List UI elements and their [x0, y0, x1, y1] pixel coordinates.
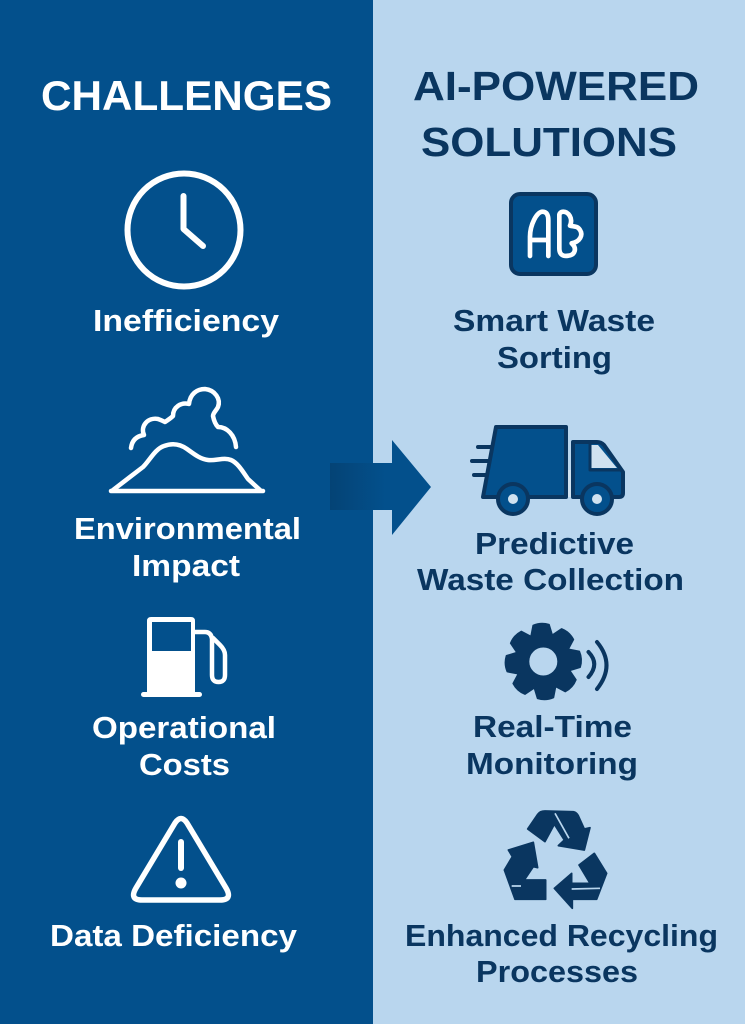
icon: recycling symbol [504, 811, 607, 908]
icon: fuel pump [144, 617, 225, 694]
icon: truck [472, 427, 623, 514]
label: real-time monitoring: Real-Time [473, 709, 632, 744]
icon: clock [128, 174, 240, 286]
panel: solutions [373, 0, 745, 1024]
label: predictive waste collection: Waste Collection [417, 562, 684, 597]
label: predictive waste collection [417, 526, 684, 597]
panel: challenges [0, 0, 373, 1024]
label: real-time monitoring [466, 709, 638, 781]
label: data deficiency: Data Deficiency [50, 918, 298, 953]
icon: gear with signal waves [505, 623, 606, 700]
heading: AI-powered solutions: AI-POWERED [413, 63, 699, 109]
icon: warning triangle [134, 818, 228, 900]
label: smart waste sorting [453, 303, 655, 375]
heading: challenges: CHALLENGES [41, 72, 332, 119]
label: predictive waste collection: Predictive [475, 526, 634, 561]
icon: AI chip [511, 194, 596, 274]
label: inefficiency: Inefficiency [93, 303, 280, 338]
heading: AI-powered solutions: SOLUTIONS [421, 119, 677, 165]
label: environmental impact: Impact [132, 548, 240, 583]
label: operational costs [92, 710, 276, 782]
heading: AI-powered solutions [413, 63, 699, 165]
label: enhanced recycling processes [405, 918, 718, 989]
label: real-time monitoring: Monitoring [466, 746, 638, 781]
label: environmental impact: Environmental [74, 511, 301, 546]
label: enhanced recycling processes: Enhanced Recycling [405, 918, 718, 953]
label: smart waste sorting: Smart Waste [453, 303, 655, 338]
label: smart waste sorting: Sorting [497, 340, 612, 375]
label: operational costs: Costs [139, 747, 230, 782]
icon: mound with smoke cloud [111, 389, 263, 491]
label: enhanced recycling processes: Processes [476, 954, 638, 989]
label: environmental impact [74, 511, 301, 583]
label: operational costs: Operational [92, 710, 276, 745]
arrow: challenges to solutions [330, 440, 431, 535]
